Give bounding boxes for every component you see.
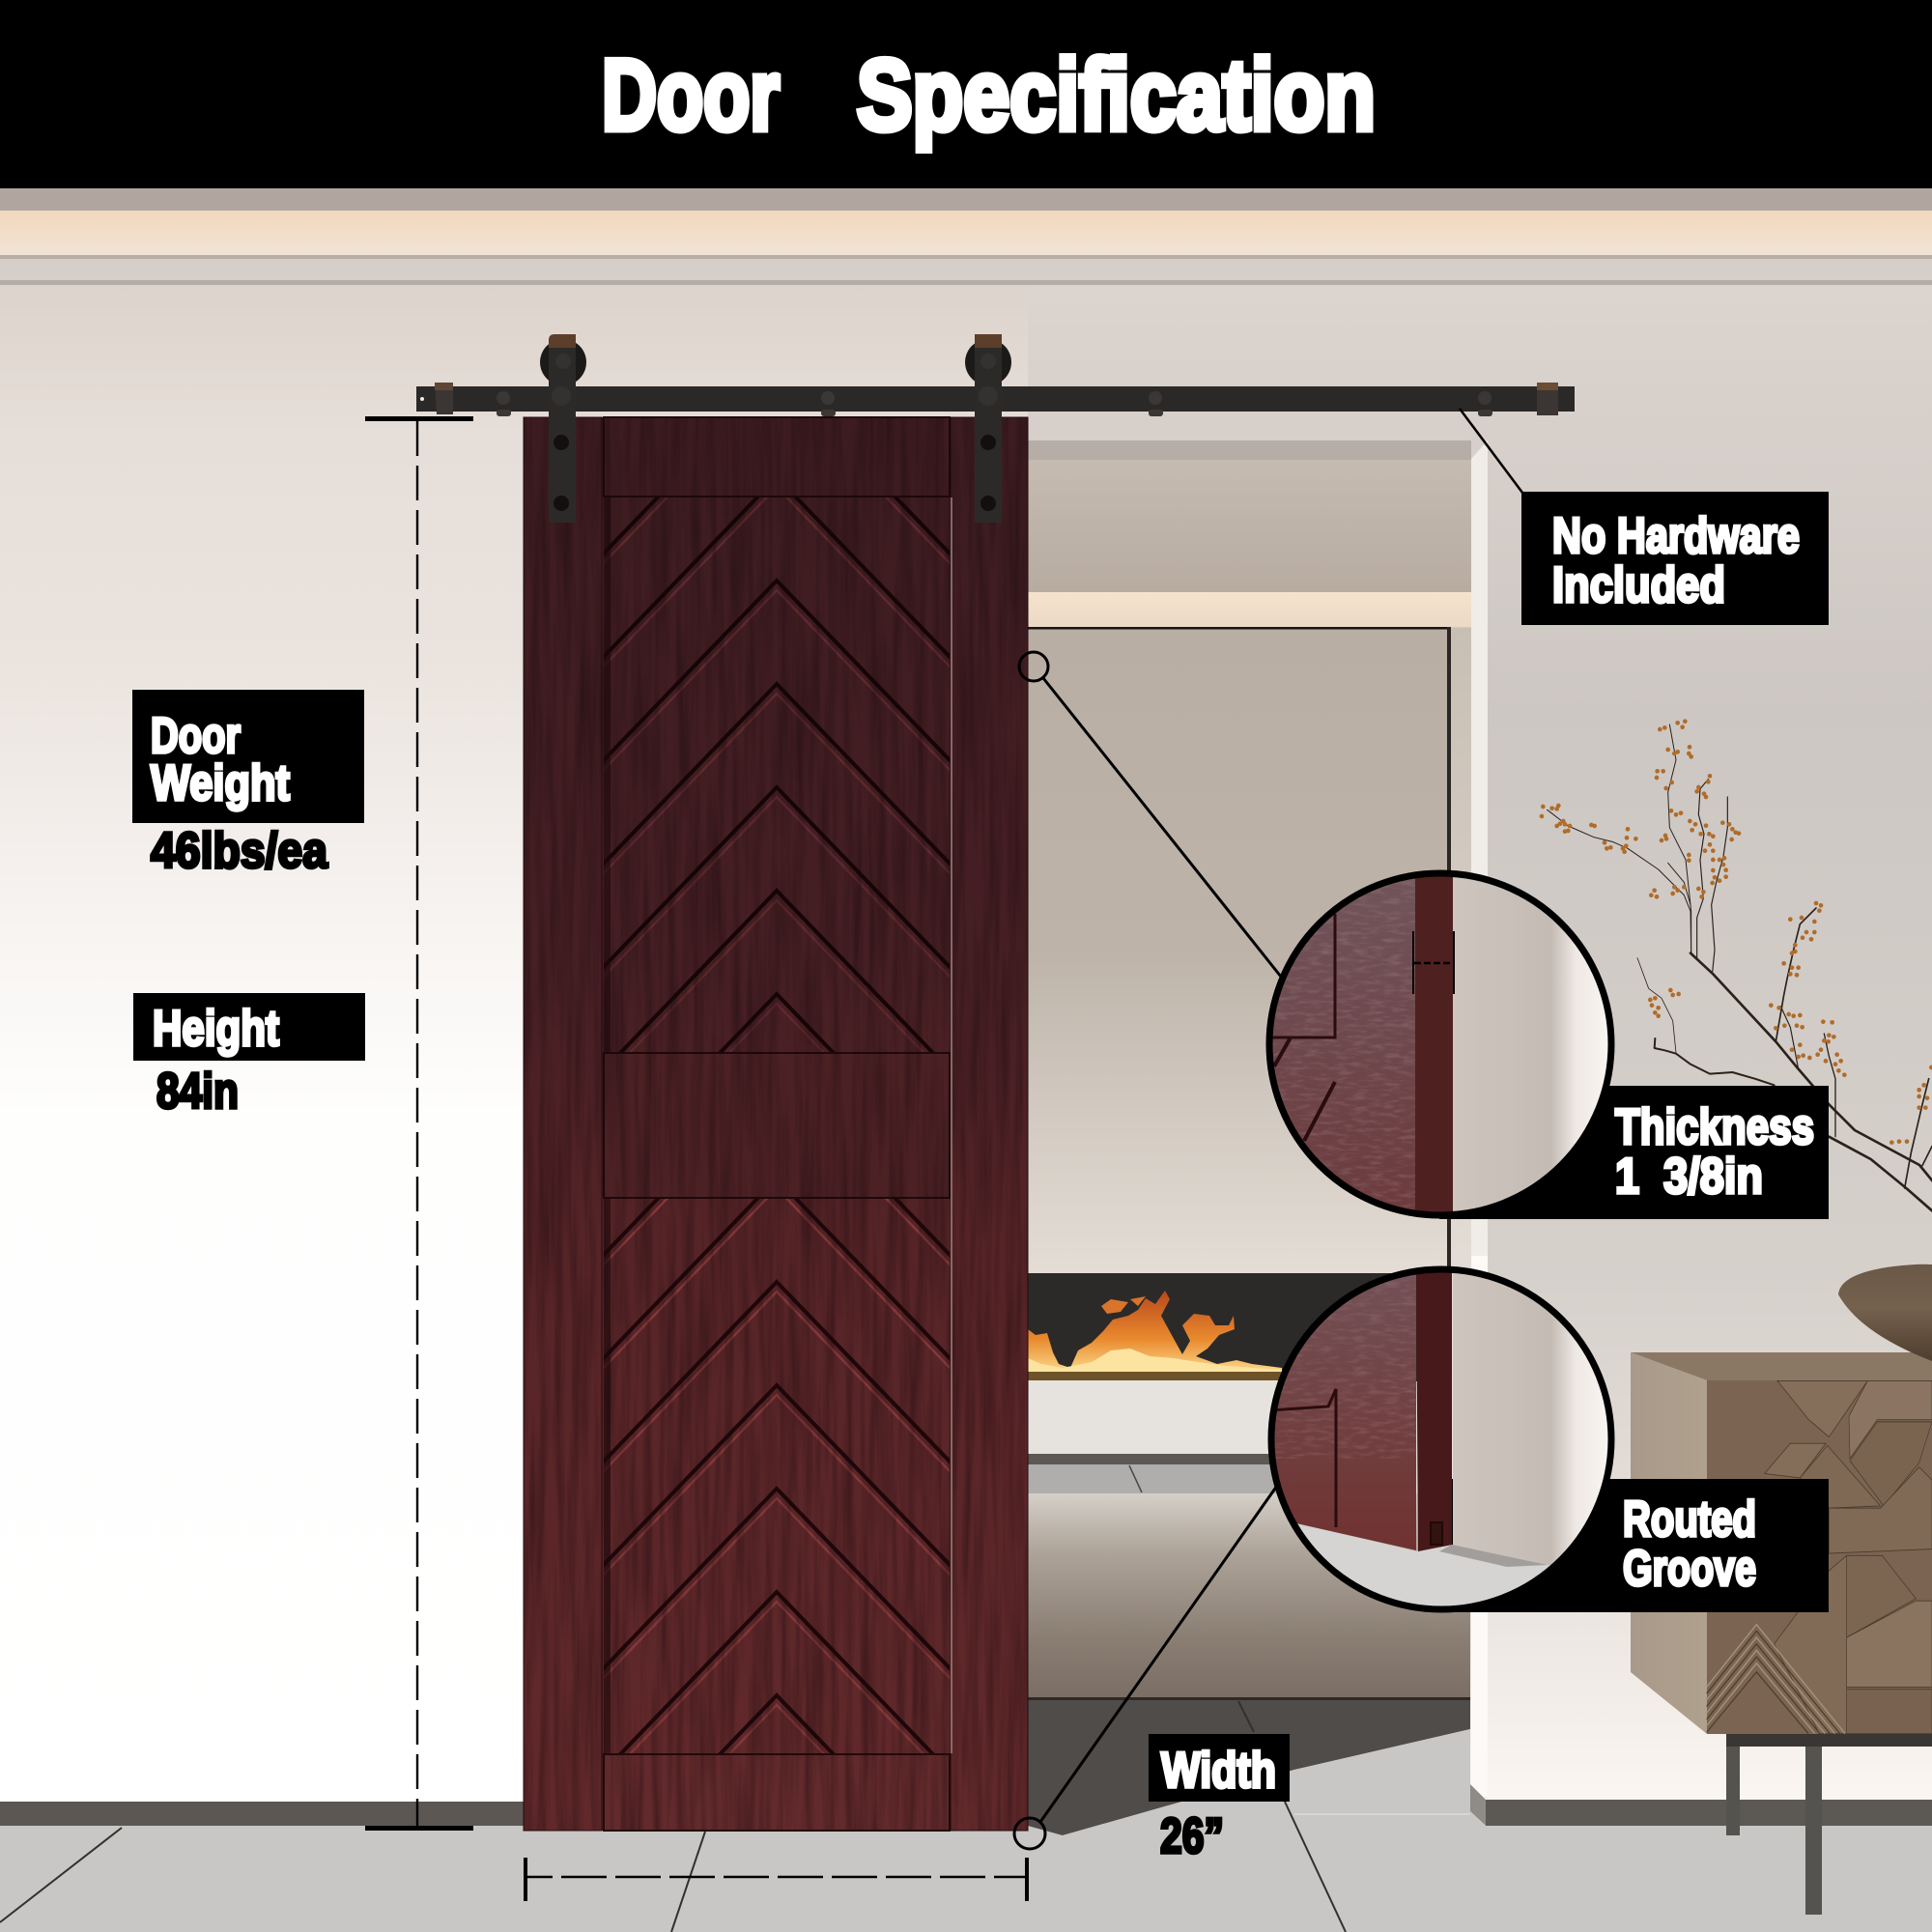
left stile xyxy=(524,417,602,1831)
top rail xyxy=(604,417,950,497)
flames xyxy=(1028,1291,1282,1372)
label: no hardware included xyxy=(1521,492,1829,625)
value: height: 84in xyxy=(156,1064,239,1120)
upper chevron panel xyxy=(604,497,950,1052)
sideboard legs xyxy=(1726,1734,1932,1915)
label text: thickness xyxy=(1615,1099,1814,1205)
track spacers xyxy=(497,391,1492,416)
label text: routed groove: Groove xyxy=(1623,1541,1756,1597)
label text: thickness: 1 3/8in xyxy=(1615,1149,1763,1205)
title: Door xyxy=(602,40,780,152)
label: door weight: Weight xyxy=(151,755,290,811)
title: Specification xyxy=(857,40,1376,152)
leader marker: routed groove xyxy=(1014,1486,1277,1849)
sideboard relief pattern xyxy=(1707,1380,1932,1734)
label: no hardware included: No Hardware xyxy=(1552,508,1800,564)
leader marker: thickness xyxy=(1019,652,1281,977)
middle rail xyxy=(604,1053,950,1198)
lower chevron panel xyxy=(604,1199,950,1753)
bottom rail xyxy=(604,1754,950,1831)
label: no hardware included: Included xyxy=(1552,557,1725,613)
berries xyxy=(1540,719,1932,1145)
value: width: 26” xyxy=(1160,1808,1224,1864)
height dimension line xyxy=(365,416,473,1831)
label text: thickness: Thickness xyxy=(1615,1099,1814,1155)
back wall xyxy=(0,285,1932,1831)
label box: routed groove xyxy=(1439,1479,1829,1612)
label: door weight: Door xyxy=(151,708,241,764)
hanger right xyxy=(965,334,1011,523)
label: width: Width xyxy=(1161,1743,1276,1799)
barn door track xyxy=(416,383,1575,416)
label: height xyxy=(133,993,365,1061)
floor xyxy=(0,1701,1932,1932)
room seen through opening xyxy=(1028,440,1488,1835)
baseboard xyxy=(0,1784,1932,1827)
title xyxy=(602,40,1376,152)
label text: routed groove xyxy=(1623,1492,1756,1597)
sideboard xyxy=(1631,1352,1932,1915)
right stile xyxy=(951,417,1028,1831)
width dimension line xyxy=(524,1858,1029,1901)
detail circle: thickness xyxy=(1256,869,1617,1222)
door xyxy=(524,374,1028,1889)
label box: thickness xyxy=(1439,1086,1829,1219)
fireplace xyxy=(1028,1273,1470,1835)
hanger left xyxy=(540,334,586,523)
vase xyxy=(1838,1264,1932,1361)
decorative branch with berries xyxy=(1540,719,1932,1210)
detail circle: routed groove xyxy=(1256,1265,1623,1623)
ceiling cove lighting and moulding xyxy=(0,188,1932,285)
title bar xyxy=(0,0,1932,188)
leader: hardware xyxy=(1460,409,1522,493)
label text: routed groove: Routed xyxy=(1623,1492,1756,1548)
label: door weight xyxy=(132,690,364,823)
value: door weight: 46lbs/ea xyxy=(151,823,328,879)
track stops xyxy=(435,383,453,414)
label: height: Height xyxy=(153,1001,279,1057)
